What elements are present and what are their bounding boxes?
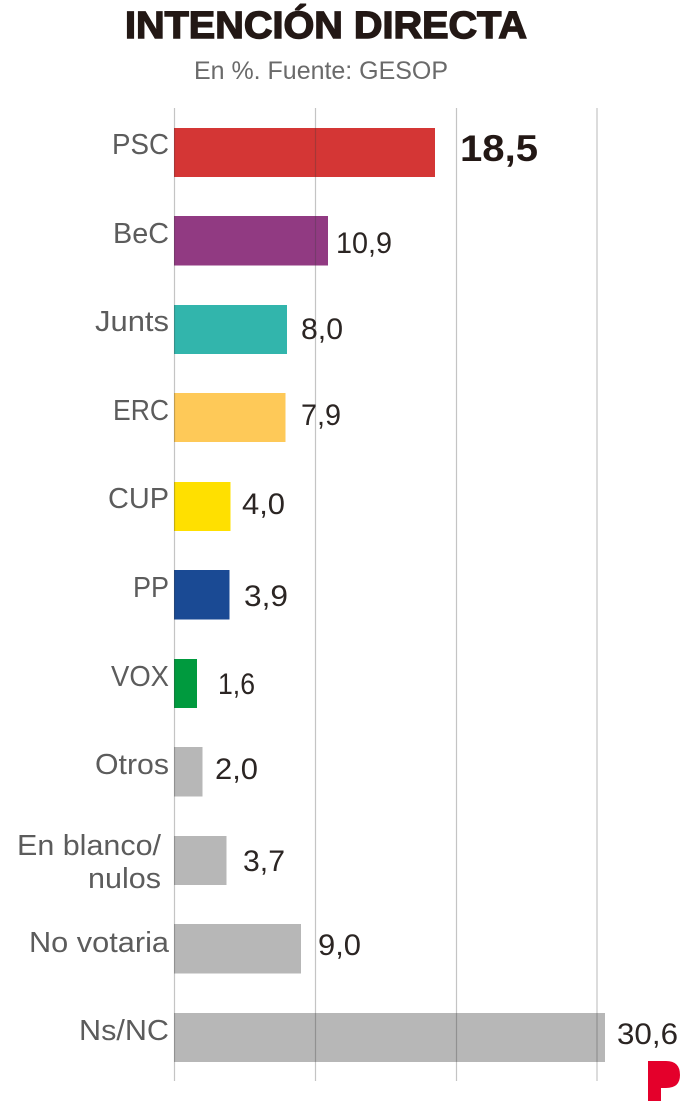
value: Ns/NC: 30,6 [617, 1018, 678, 1051]
label: No votaria: No votaria [29, 927, 170, 959]
value: En blanco/nulos: 3,7 [243, 845, 285, 878]
label: PSC: PSC [112, 129, 169, 161]
label: VOX: VOX [111, 661, 169, 693]
label: nulos: nulos [88, 863, 161, 895]
bar: BeC [174, 216, 328, 266]
value: BeC: 10,9 [336, 227, 392, 260]
value: ERC: 7,9 [301, 399, 341, 432]
label: ERC: ERC [113, 395, 169, 427]
value: PSC: 18,5 [460, 128, 538, 169]
label: PP: PP [133, 572, 169, 604]
title: INTENCIÓN DIRECTA [125, 3, 527, 47]
label: En blanco/: En blanco/ [17, 830, 162, 862]
subtitle: En %. Fuente: GESOP [194, 57, 448, 85]
bar: VOX [174, 659, 197, 708]
value: Otros: 2,0 [215, 753, 258, 786]
label: CUP: CUP [108, 483, 169, 515]
bar: Ns/NC [174, 1013, 605, 1062]
bar: No votaria [174, 924, 301, 974]
label: Otros: Otros [95, 749, 169, 781]
label: Junts: Junts [95, 306, 169, 338]
bar: Otros [174, 747, 202, 796]
label: Ns/NC: Ns/NC [79, 1015, 169, 1047]
value: Junts: 8,0 [301, 313, 343, 346]
label: BeC: BeC [113, 218, 169, 250]
bar: ERC [174, 393, 286, 442]
bar: En blanco/nulos [174, 836, 226, 885]
chart: bars [174, 128, 605, 1062]
value: No votaria: 9,0 [318, 929, 361, 962]
value: PP: 3,9 [244, 580, 288, 613]
bar: PP [174, 570, 230, 620]
bar: PSC [174, 128, 435, 177]
value: CUP: 4,0 [242, 488, 285, 521]
value: VOX: 1,6 [218, 668, 255, 701]
bar: Junts [174, 305, 287, 354]
bar: CUP [174, 482, 230, 531]
category labels [17, 129, 170, 1047]
icon: publisher logo P [648, 1061, 680, 1101]
value labels [215, 128, 678, 1051]
